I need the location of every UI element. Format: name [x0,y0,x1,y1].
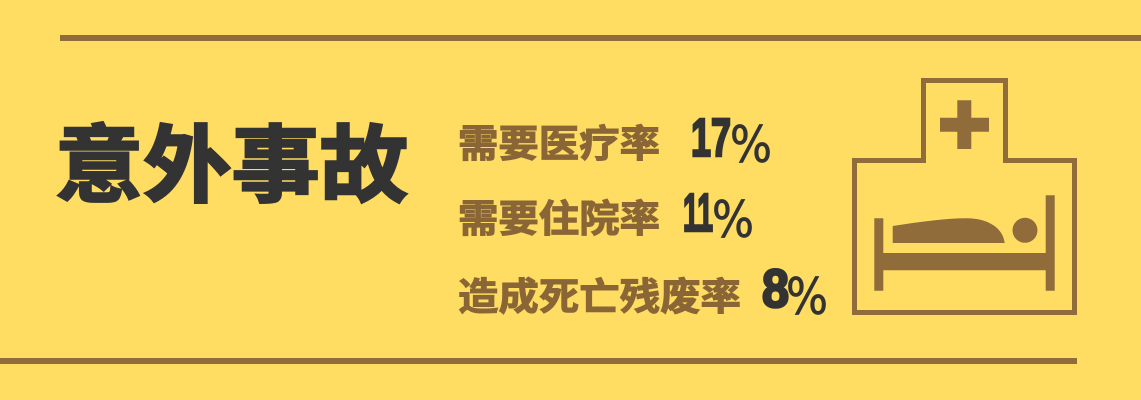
label: death or disability rate: 造成死亡残废率 [458,277,741,319]
title: 意外事故 [55,119,408,213]
hospital outline [854,80,1074,312]
value: 17% [691,108,772,174]
value: 8%: % [786,268,828,326]
stat: medical treatment rate [458,108,772,174]
stat: hospitalization rate [458,183,754,249]
icon: hospital with patient in bed [854,80,1074,312]
value: 11%: 11 [683,183,713,243]
value: 17%: % [730,116,772,174]
value: 8%: 8 [762,259,789,319]
bed [874,195,1055,291]
medical cross [940,100,989,149]
value: 17%: 17 [691,108,731,168]
label: hospitalization rate: 需要住院率 [458,199,660,241]
label: medical treatment rate: 需要医疗率 [458,124,660,166]
patient head [1012,218,1038,243]
patient body [893,218,1005,243]
stat: death or disability rate [458,259,828,326]
value: 8% [762,259,828,326]
value: 11%: % [712,191,754,249]
